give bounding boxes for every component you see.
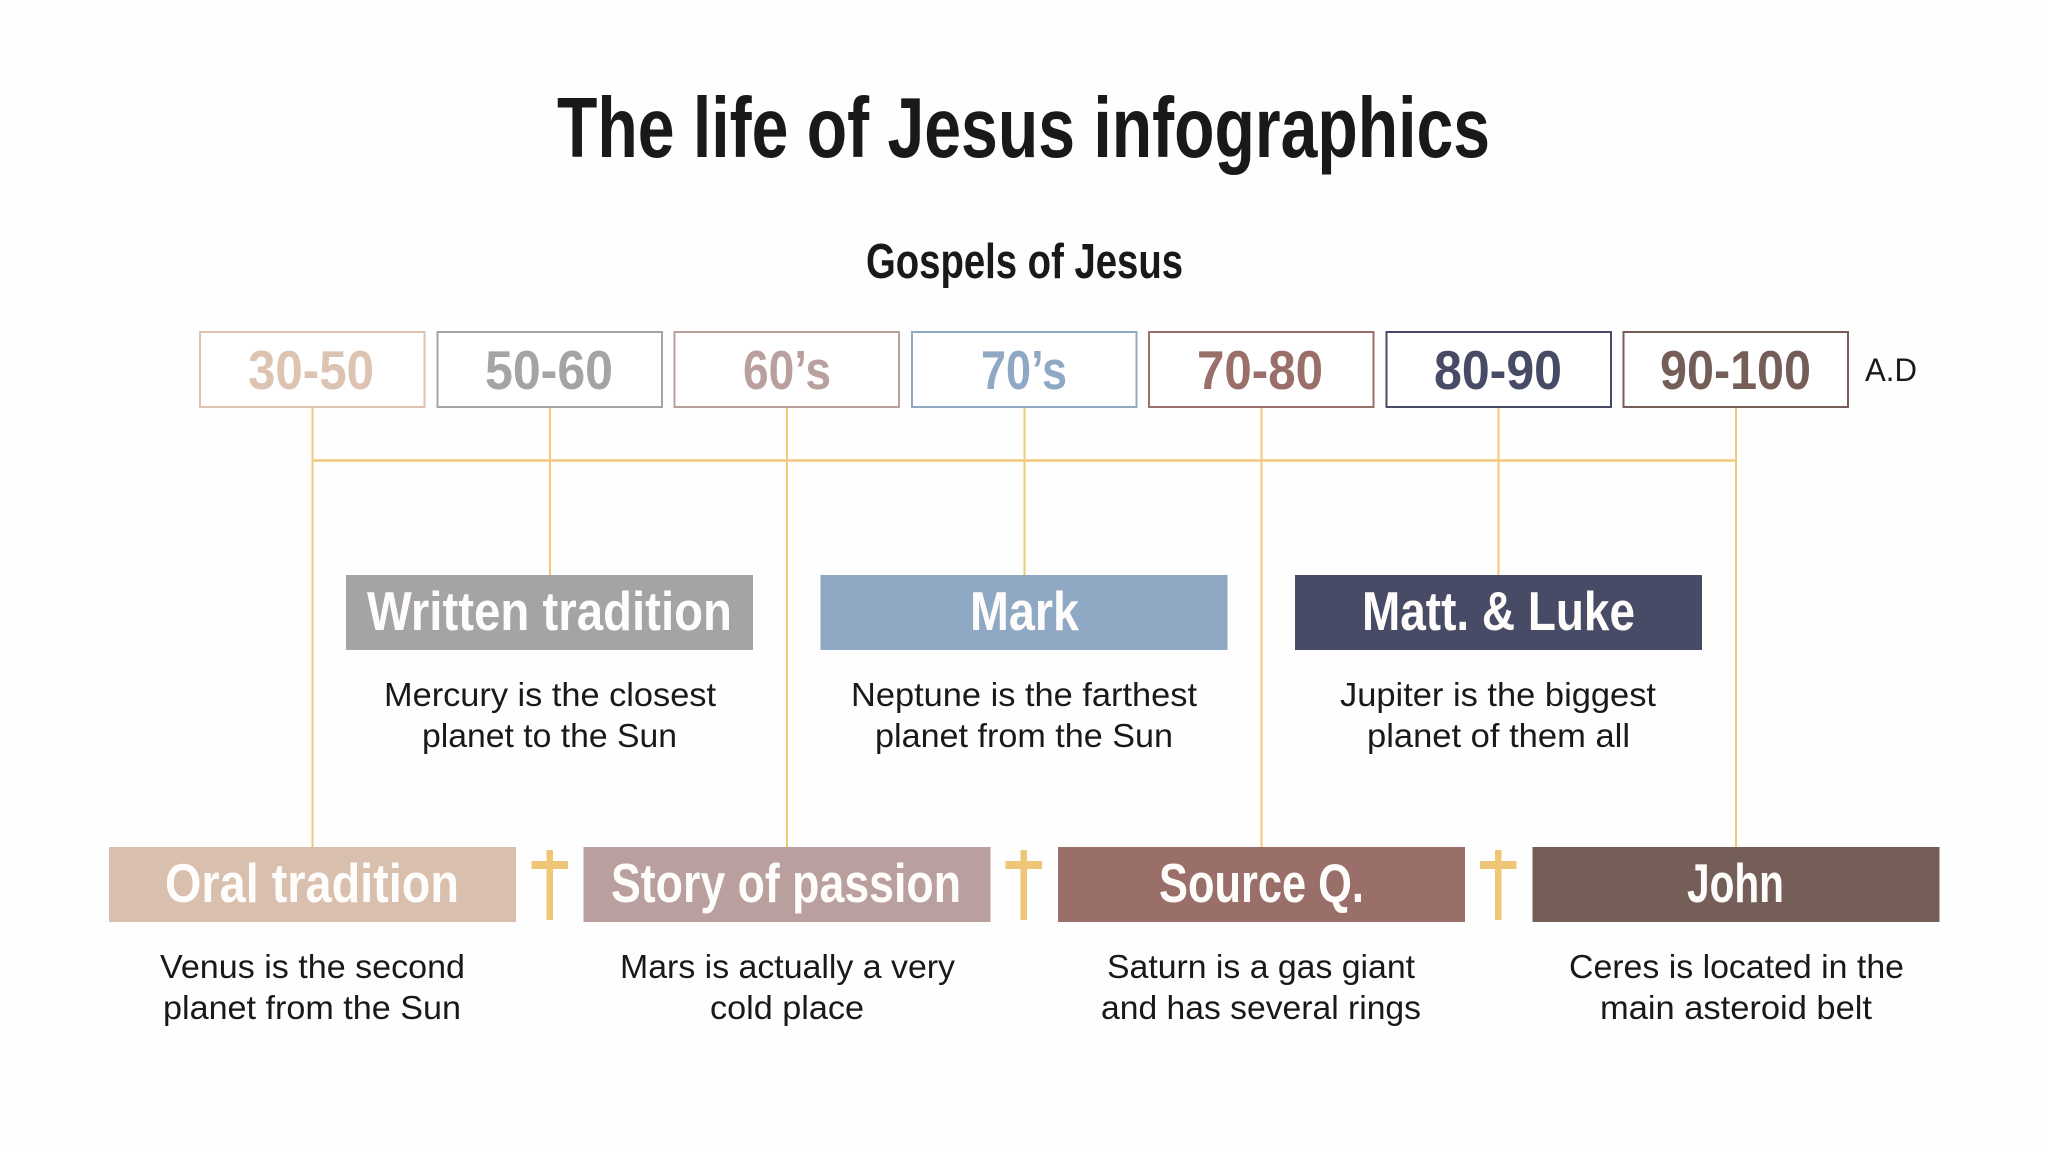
panel: john: main asteroid belt [1600,989,1872,1026]
panel: matt and luke: Jupiter is the biggest [1340,676,1656,713]
panel: mark [820,575,1228,754]
date box: 70's: 70’s [981,339,1067,401]
panel: source q: Source Q. [1159,852,1364,914]
date box: 60's: 60’s [743,339,831,401]
panel: mark: Mark [970,580,1079,642]
panel: oral tradition: Oral tradition [165,852,459,914]
era label: A.D: A.D [1865,352,1917,388]
date box: 70's [912,332,1136,407]
panel: john: John [1687,852,1784,914]
panel: source q [1058,847,1465,1026]
icon: cross 2 [1006,850,1042,920]
panel: matt and luke: planet of them all [1367,717,1630,754]
panel: matt and luke [1295,575,1702,754]
panel: oral tradition [109,847,516,1026]
date box: 90-100 [1624,332,1848,407]
panel: story of passion: Mars is actually a very [620,948,955,985]
date box: 30-50 [200,332,424,407]
subtitle: Gospels of Jesus [866,235,1183,289]
panel: written tradition: Written tradition [367,580,732,642]
date box: 70-80: 70-80 [1197,339,1323,401]
panel: matt and luke: Matt. & Luke [1362,580,1635,642]
panel: story of passion: Story of passion [611,852,961,914]
timeline connectors [312,408,1736,847]
title: The life of Jesus infographics [557,81,1490,176]
date box: 90-100: 90-100 [1660,339,1811,401]
panel: source q: and has several rings [1101,989,1421,1026]
panel: mark: Neptune is the farthest [851,676,1197,713]
date box: 50-60 [438,332,662,407]
panel: mark: planet from the Sun [875,717,1173,754]
date box: 50-60: 50-60 [485,339,613,401]
icon: cross 1 [532,850,568,920]
date box: 70-80 [1149,332,1374,407]
panel: john: Ceres is located in the [1569,948,1904,985]
icon: cross 3 [1480,850,1516,920]
panel: written tradition: Mercury is the closest [384,676,716,713]
panel: oral tradition: planet from the Sun [163,989,461,1026]
panel: story of passion [584,847,990,1026]
date box: 60's [674,332,899,407]
date box: 80-90: 80-90 [1434,339,1562,401]
panel: source q: Saturn is a gas giant [1107,948,1415,985]
date box: 30-50: 30-50 [248,339,374,401]
panel: written tradition: planet to the Sun [422,717,677,754]
panel: oral tradition: Venus is the second [160,948,465,985]
date box: 80-90 [1386,332,1611,407]
panel: written tradition [346,575,753,754]
panel: john [1532,847,1940,1026]
panel: story of passion: cold place [710,989,864,1026]
